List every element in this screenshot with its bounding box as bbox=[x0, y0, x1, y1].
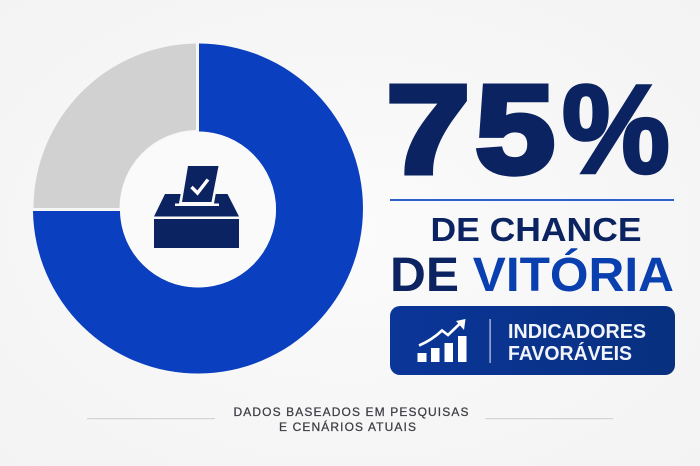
text: de chance: DE CHANCE bbox=[430, 211, 642, 248]
donut segment: 25% grey bbox=[34, 44, 196, 208]
icon: ballot box bbox=[154, 164, 239, 248]
icon: rising bar chart bbox=[418, 319, 466, 362]
footer note: E CENÁRIOS ATUAIS bbox=[279, 419, 416, 434]
headline: 75%: 7 bbox=[386, 60, 470, 200]
headline: 75% bbox=[386, 60, 670, 200]
headline: 75%: % bbox=[562, 61, 670, 200]
donut chart bbox=[33, 44, 363, 373]
badge text: INDICADORES bbox=[508, 321, 646, 343]
text: de vitória: DE VITÓRIA bbox=[390, 247, 674, 302]
badge: indicadores favoráveis bbox=[390, 306, 675, 375]
footer note bbox=[87, 405, 613, 434]
divider line bbox=[390, 199, 674, 201]
footer note: DADOS BASEADOS EM PESQUISAS bbox=[234, 405, 468, 419]
badge: indicadores favoráveis: FAVORÁVEIS bbox=[508, 342, 632, 365]
donut centre bbox=[120, 132, 276, 288]
headline: 75%: 5 bbox=[476, 61, 555, 200]
donut segment: 75% blue bbox=[33, 44, 363, 373]
